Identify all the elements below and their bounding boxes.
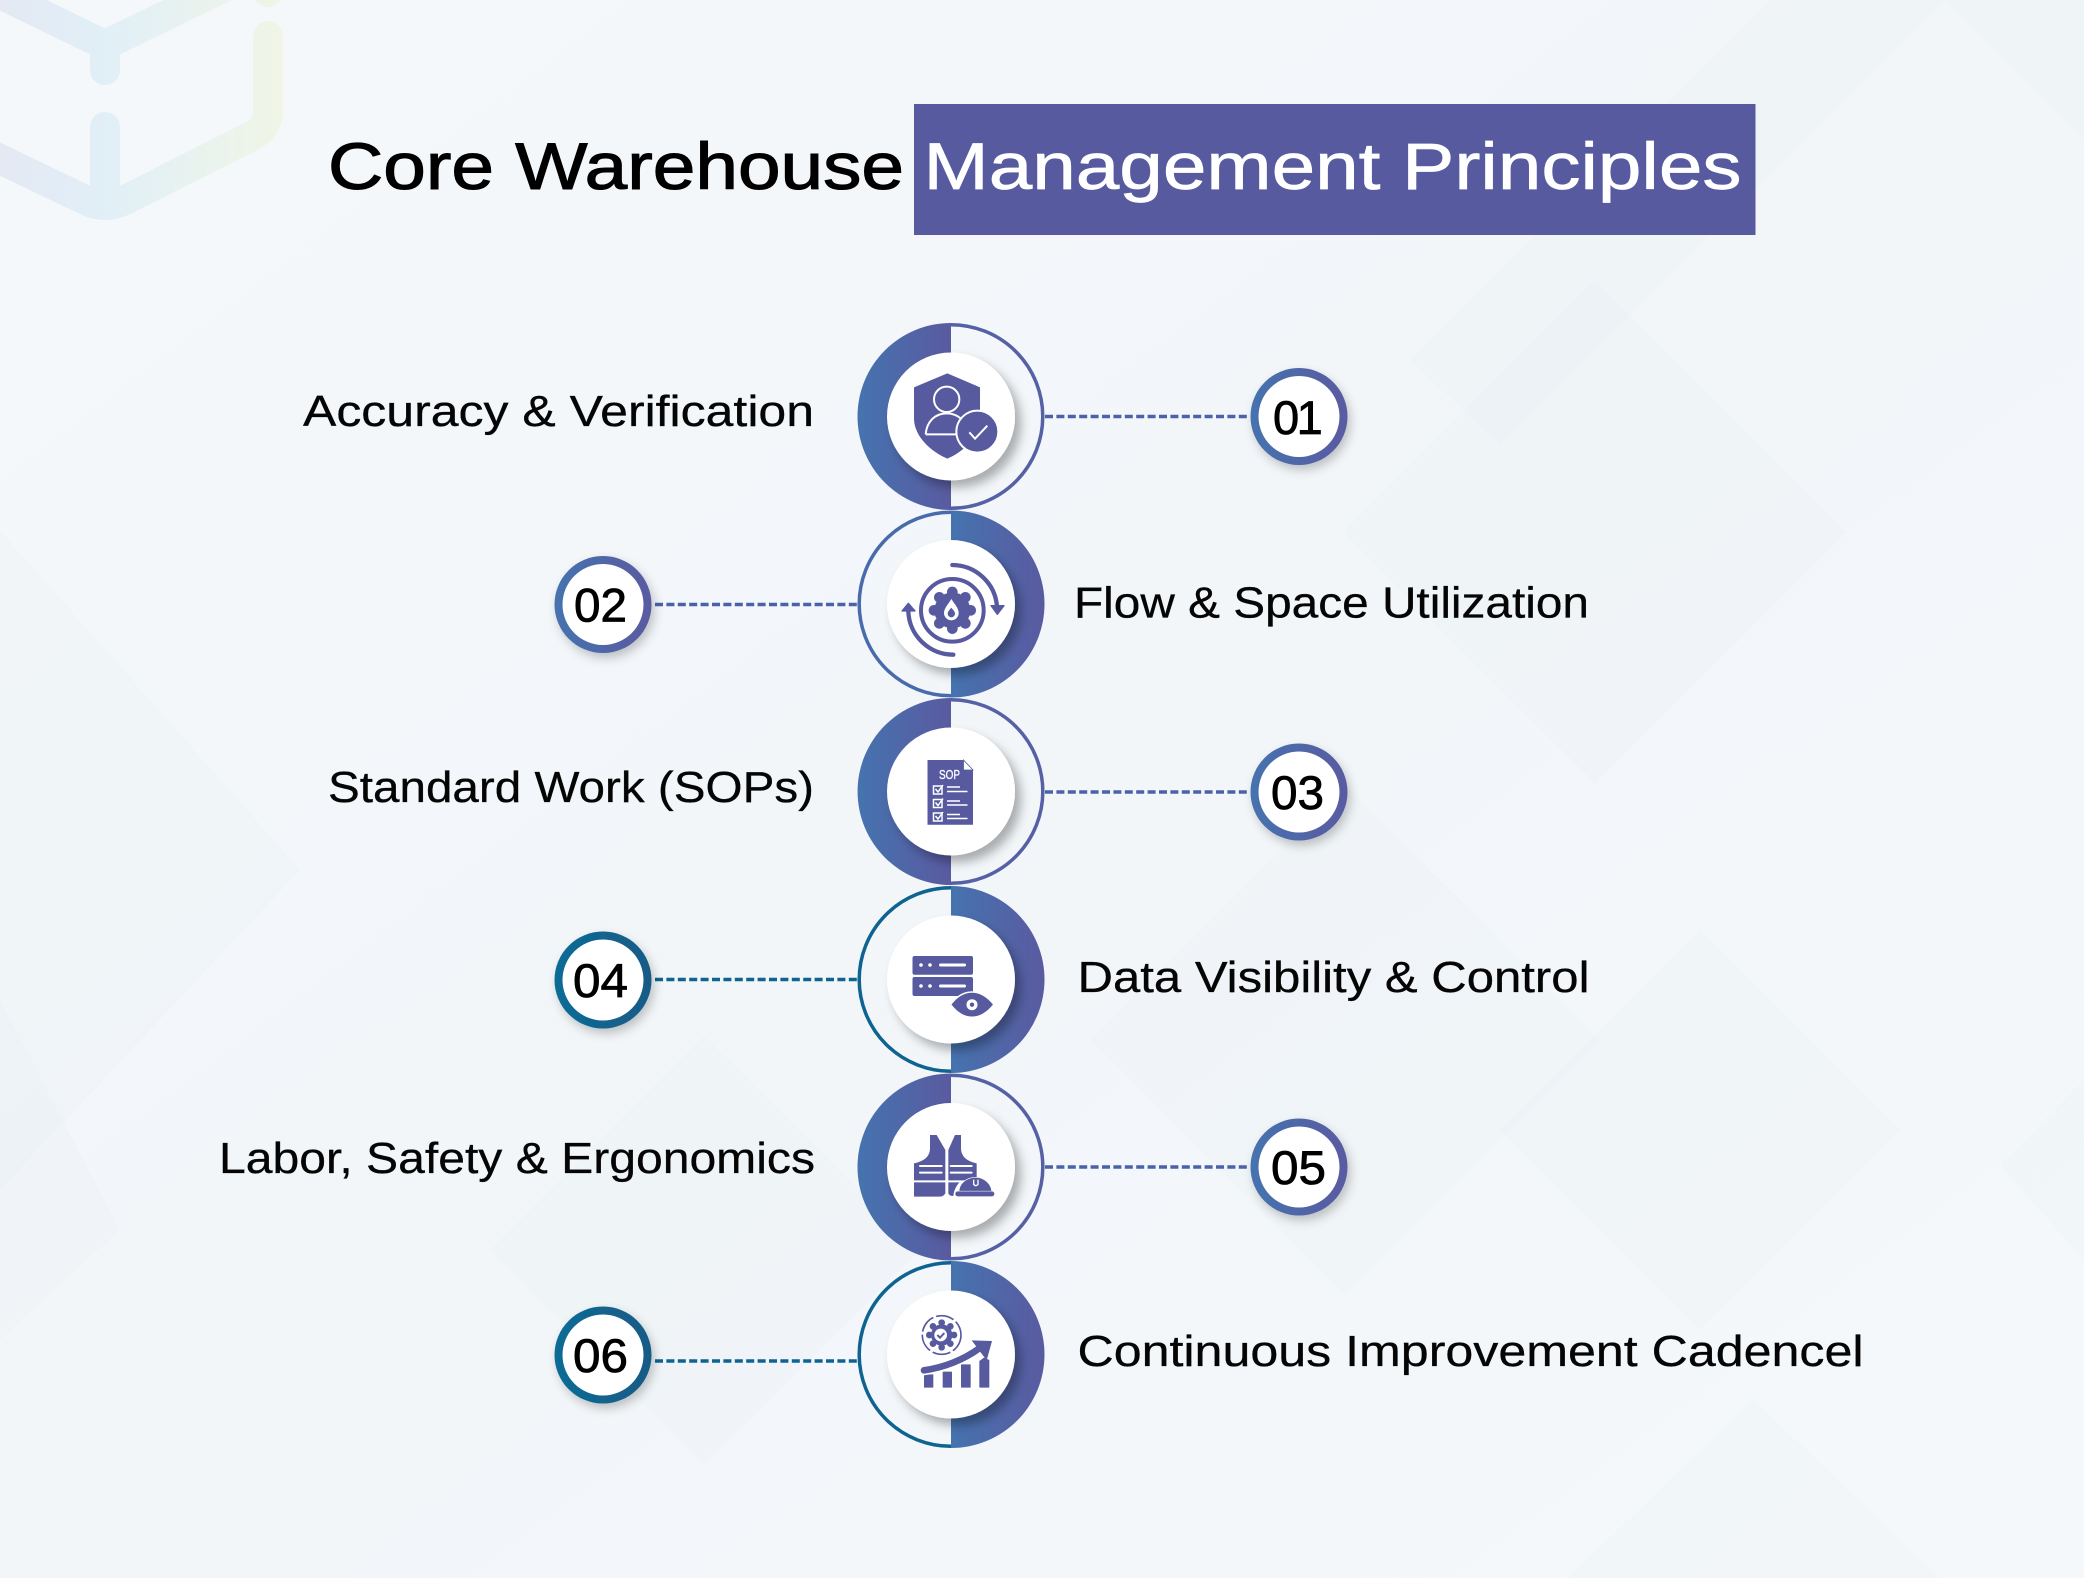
icon: SOP document: [928, 760, 973, 825]
icon: gear cycle: [902, 565, 1004, 655]
number badge: [1250, 744, 1348, 840]
number badge: 02: [574, 578, 627, 632]
step 01: Accuracy & Verification: [303, 323, 1348, 510]
half ring: [951, 886, 1044, 1073]
icon: servers and eye: [912, 956, 993, 1016]
number badge: [554, 1306, 652, 1404]
title text: Core Warehouse: Core Warehouse: [328, 129, 904, 203]
label: Flow & Space Utilization: [1074, 578, 1589, 628]
half ring: [951, 1261, 1044, 1448]
label: Continuous Improvement Cadencel: [1078, 1327, 1864, 1376]
number badge: [554, 556, 652, 653]
title highlight box: [914, 104, 1756, 235]
half ring: [858, 698, 951, 885]
icon: shield with person and check: [914, 373, 998, 459]
label: Labor, Safety & Ergonomics: [219, 1134, 815, 1183]
connector: [655, 603, 858, 606]
step 03: Standard Work (SOPs): [328, 698, 1348, 885]
number badge: [554, 932, 652, 1028]
label: Standard Work (SOPs): [328, 763, 814, 812]
step 06: Continuous Improvement Cadencel: [554, 1261, 1864, 1448]
number badge: [1250, 1118, 1348, 1216]
title: [328, 104, 1756, 235]
step 02: Flow & Space Utilization: [554, 510, 1589, 698]
step 05: Labor, Safety & Ergonomics: [219, 1074, 1348, 1260]
number badge: 01: [1273, 391, 1321, 444]
connector: [655, 1359, 858, 1363]
title text: Management Principles: Management Principles: [924, 129, 1742, 203]
number badge: 04: [573, 954, 628, 1007]
half ring: [858, 1074, 951, 1260]
logo watermark: cube: [0, 0, 268, 205]
number badge: 05: [1271, 1141, 1326, 1194]
connector: [655, 978, 858, 981]
connector: [1045, 790, 1249, 794]
icon: SOP document: SOP: [939, 767, 960, 782]
connector: [1045, 415, 1249, 418]
half ring: [858, 323, 951, 510]
number badge: 06: [573, 1329, 628, 1382]
icon: safety vest and hard hat: [914, 1135, 994, 1197]
connector: [1045, 1165, 1249, 1169]
number badge: 03: [1271, 766, 1324, 819]
half ring: [951, 510, 1044, 698]
number badge: [1250, 368, 1348, 465]
label: Data Visibility & Control: [1078, 953, 1590, 1002]
step 04: Data Visibility & Control: [554, 886, 1590, 1073]
icon: gear and growth chart: [922, 1316, 992, 1388]
label: Accuracy & Verification: [303, 387, 814, 436]
